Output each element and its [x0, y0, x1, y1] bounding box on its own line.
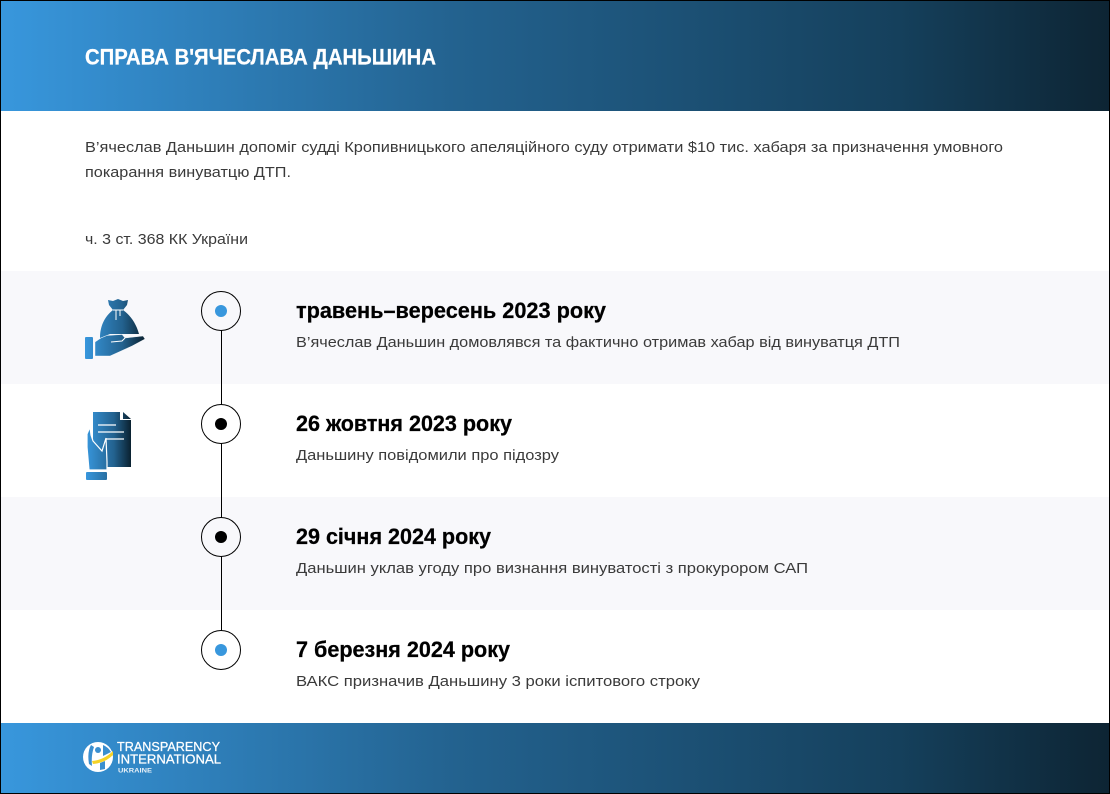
- legal article reference: ч. 3 ст. 368 КК України: [85, 232, 248, 248]
- intro text: В’ячеслав Даньшин допоміг судді Кропивницького апеляційного суду отримати $10 тис. хабаря за призначення умовного: [85, 139, 1003, 156]
- event 3: [296, 524, 808, 577]
- event 1: [296, 298, 900, 351]
- timeline marker 2: [202, 404, 240, 444]
- event 3: Даньшин уклав угоду про визнання винуватості з прокурором САП: [296, 560, 808, 577]
- timeline marker 1: [202, 292, 240, 330]
- event 2: 26 жовтня 2023 року: [296, 411, 513, 436]
- timeline marker 4: [202, 630, 240, 670]
- event 4: [296, 637, 701, 690]
- intro text: [85, 139, 1003, 181]
- event 2: Даньшину повідомили про підозру: [296, 447, 560, 464]
- icon: document in hand: [86, 412, 131, 480]
- intro text: покарання винуватцю ДТП.: [85, 164, 291, 181]
- icon: money bag on hand: [85, 299, 145, 359]
- logo: Transparency International Ukraine: [83, 740, 221, 774]
- title: СПРАВА В'ЯЧЕСЛАВА ДАНЬШИНА: [85, 44, 436, 70]
- timeline line: [220, 311, 222, 650]
- row backgrounds: [0, 271, 1110, 610]
- event 1: травень–вересень 2023 року: [296, 298, 607, 323]
- logo: Transparency International Ukraine: INTERNATIONAL: [117, 752, 221, 766]
- event 3: 29 січня 2024 року: [296, 524, 492, 549]
- event 4: ВАКС призначив Даньшину 3 роки іспитового строку: [296, 673, 701, 690]
- footer band: [0, 723, 1110, 794]
- event 2: [296, 411, 560, 464]
- logo: Transparency International Ukraine: TRANSPARENCY: [117, 740, 221, 754]
- logo: Transparency International Ukraine: UKRAINE: [118, 768, 153, 774]
- event 4: 7 березня 2024 року: [296, 637, 511, 662]
- event 1: В’ячеслав Даньшин домовлявся та фактично отримав хабар від винуватця ДТП: [296, 334, 900, 351]
- timeline marker 3: [202, 518, 240, 556]
- header band: [0, 0, 1110, 111]
